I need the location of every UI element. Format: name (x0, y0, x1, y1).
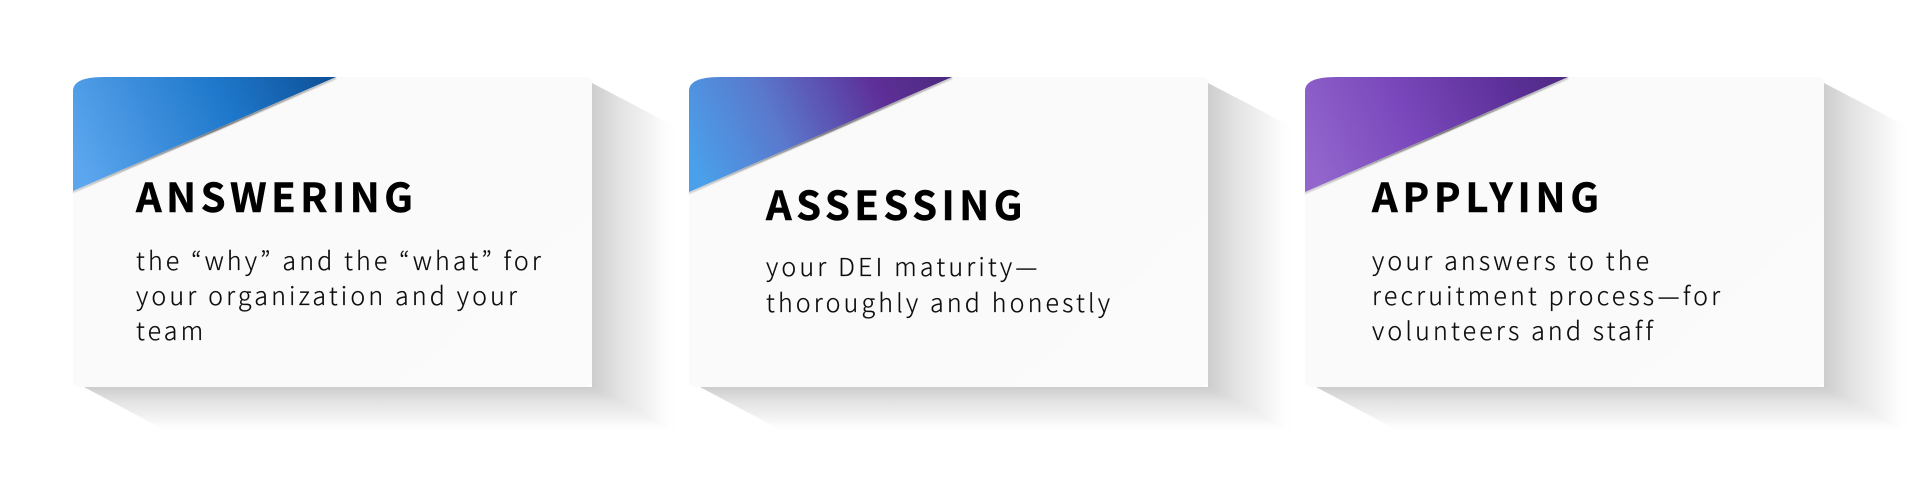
description: answering: the “why” and the “what” for (136, 242, 544, 278)
heading: applying: APPLYING (1371, 166, 1604, 224)
card panel: answering (73, 77, 592, 387)
description: assessing: your DEI maturity— (766, 248, 1041, 284)
corner banner: blue gradient (73, 77, 336, 191)
card sheen: applying (1632, 215, 1824, 387)
card panel: assessing (689, 77, 1208, 387)
card shadow: answering (84, 83, 680, 434)
card: assessing (689, 77, 1296, 434)
heading: assessing: ASSESSING (765, 174, 1027, 232)
description: applying: volunteers and staff (1372, 312, 1656, 348)
corner shadow: applying (1305, 77, 1568, 194)
corner shadow: assessing (689, 77, 952, 194)
heading: answering: ANSWERING (135, 166, 417, 224)
description: answering: team (136, 312, 206, 348)
card: answering (73, 77, 680, 434)
corner banner: purple gradient (1305, 77, 1568, 192)
corner banner: blue to purple gradient (689, 77, 952, 192)
description: applying: recruitment process—for (1372, 277, 1723, 313)
description: applying: your answers to the (1372, 242, 1652, 278)
card shadow: assessing (700, 83, 1296, 434)
corner shadow: answering (73, 77, 336, 193)
card sheen: assessing (1016, 215, 1208, 387)
card panel: applying (1305, 77, 1824, 387)
card: applying (1305, 77, 1912, 434)
description: assessing: thoroughly and honestly (766, 284, 1113, 320)
card shadow: applying (1316, 83, 1912, 434)
card sheen: answering (400, 215, 592, 387)
description: answering: your organization and your (136, 277, 520, 313)
